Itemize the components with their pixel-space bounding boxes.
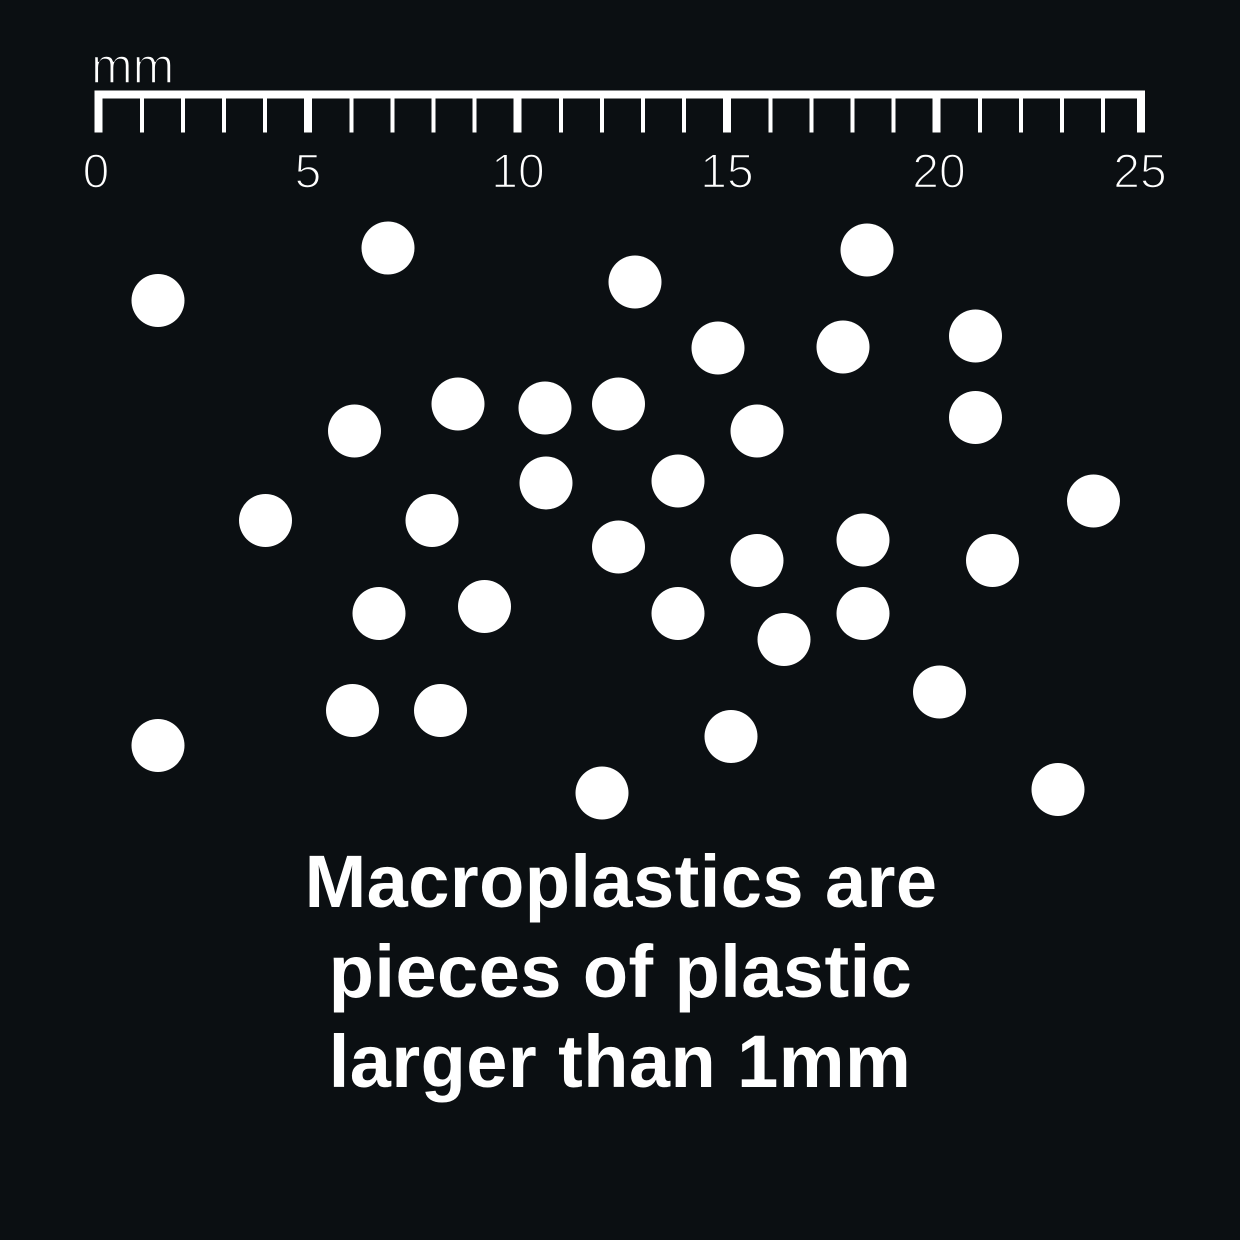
- ruler scale numbers: [83, 146, 1167, 198]
- caption: pieces of plastic: [329, 930, 912, 1013]
- ruler: [94, 90, 1145, 132]
- caption: [305, 840, 937, 1103]
- ruler scale numbers: 0: [83, 146, 109, 198]
- caption: Macroplastics are: [305, 840, 937, 923]
- ruler scale numbers: 20: [912, 146, 966, 198]
- ruler scale numbers: 10: [491, 146, 545, 198]
- unit label: mm: mm: [91, 38, 174, 94]
- ruler scale numbers: 5: [295, 146, 321, 198]
- ruler scale numbers: 25: [1113, 146, 1167, 198]
- ruler scale numbers: 15: [700, 146, 754, 198]
- macroplastic pieces: [132, 222, 1120, 820]
- caption: larger than 1mm: [329, 1020, 911, 1103]
